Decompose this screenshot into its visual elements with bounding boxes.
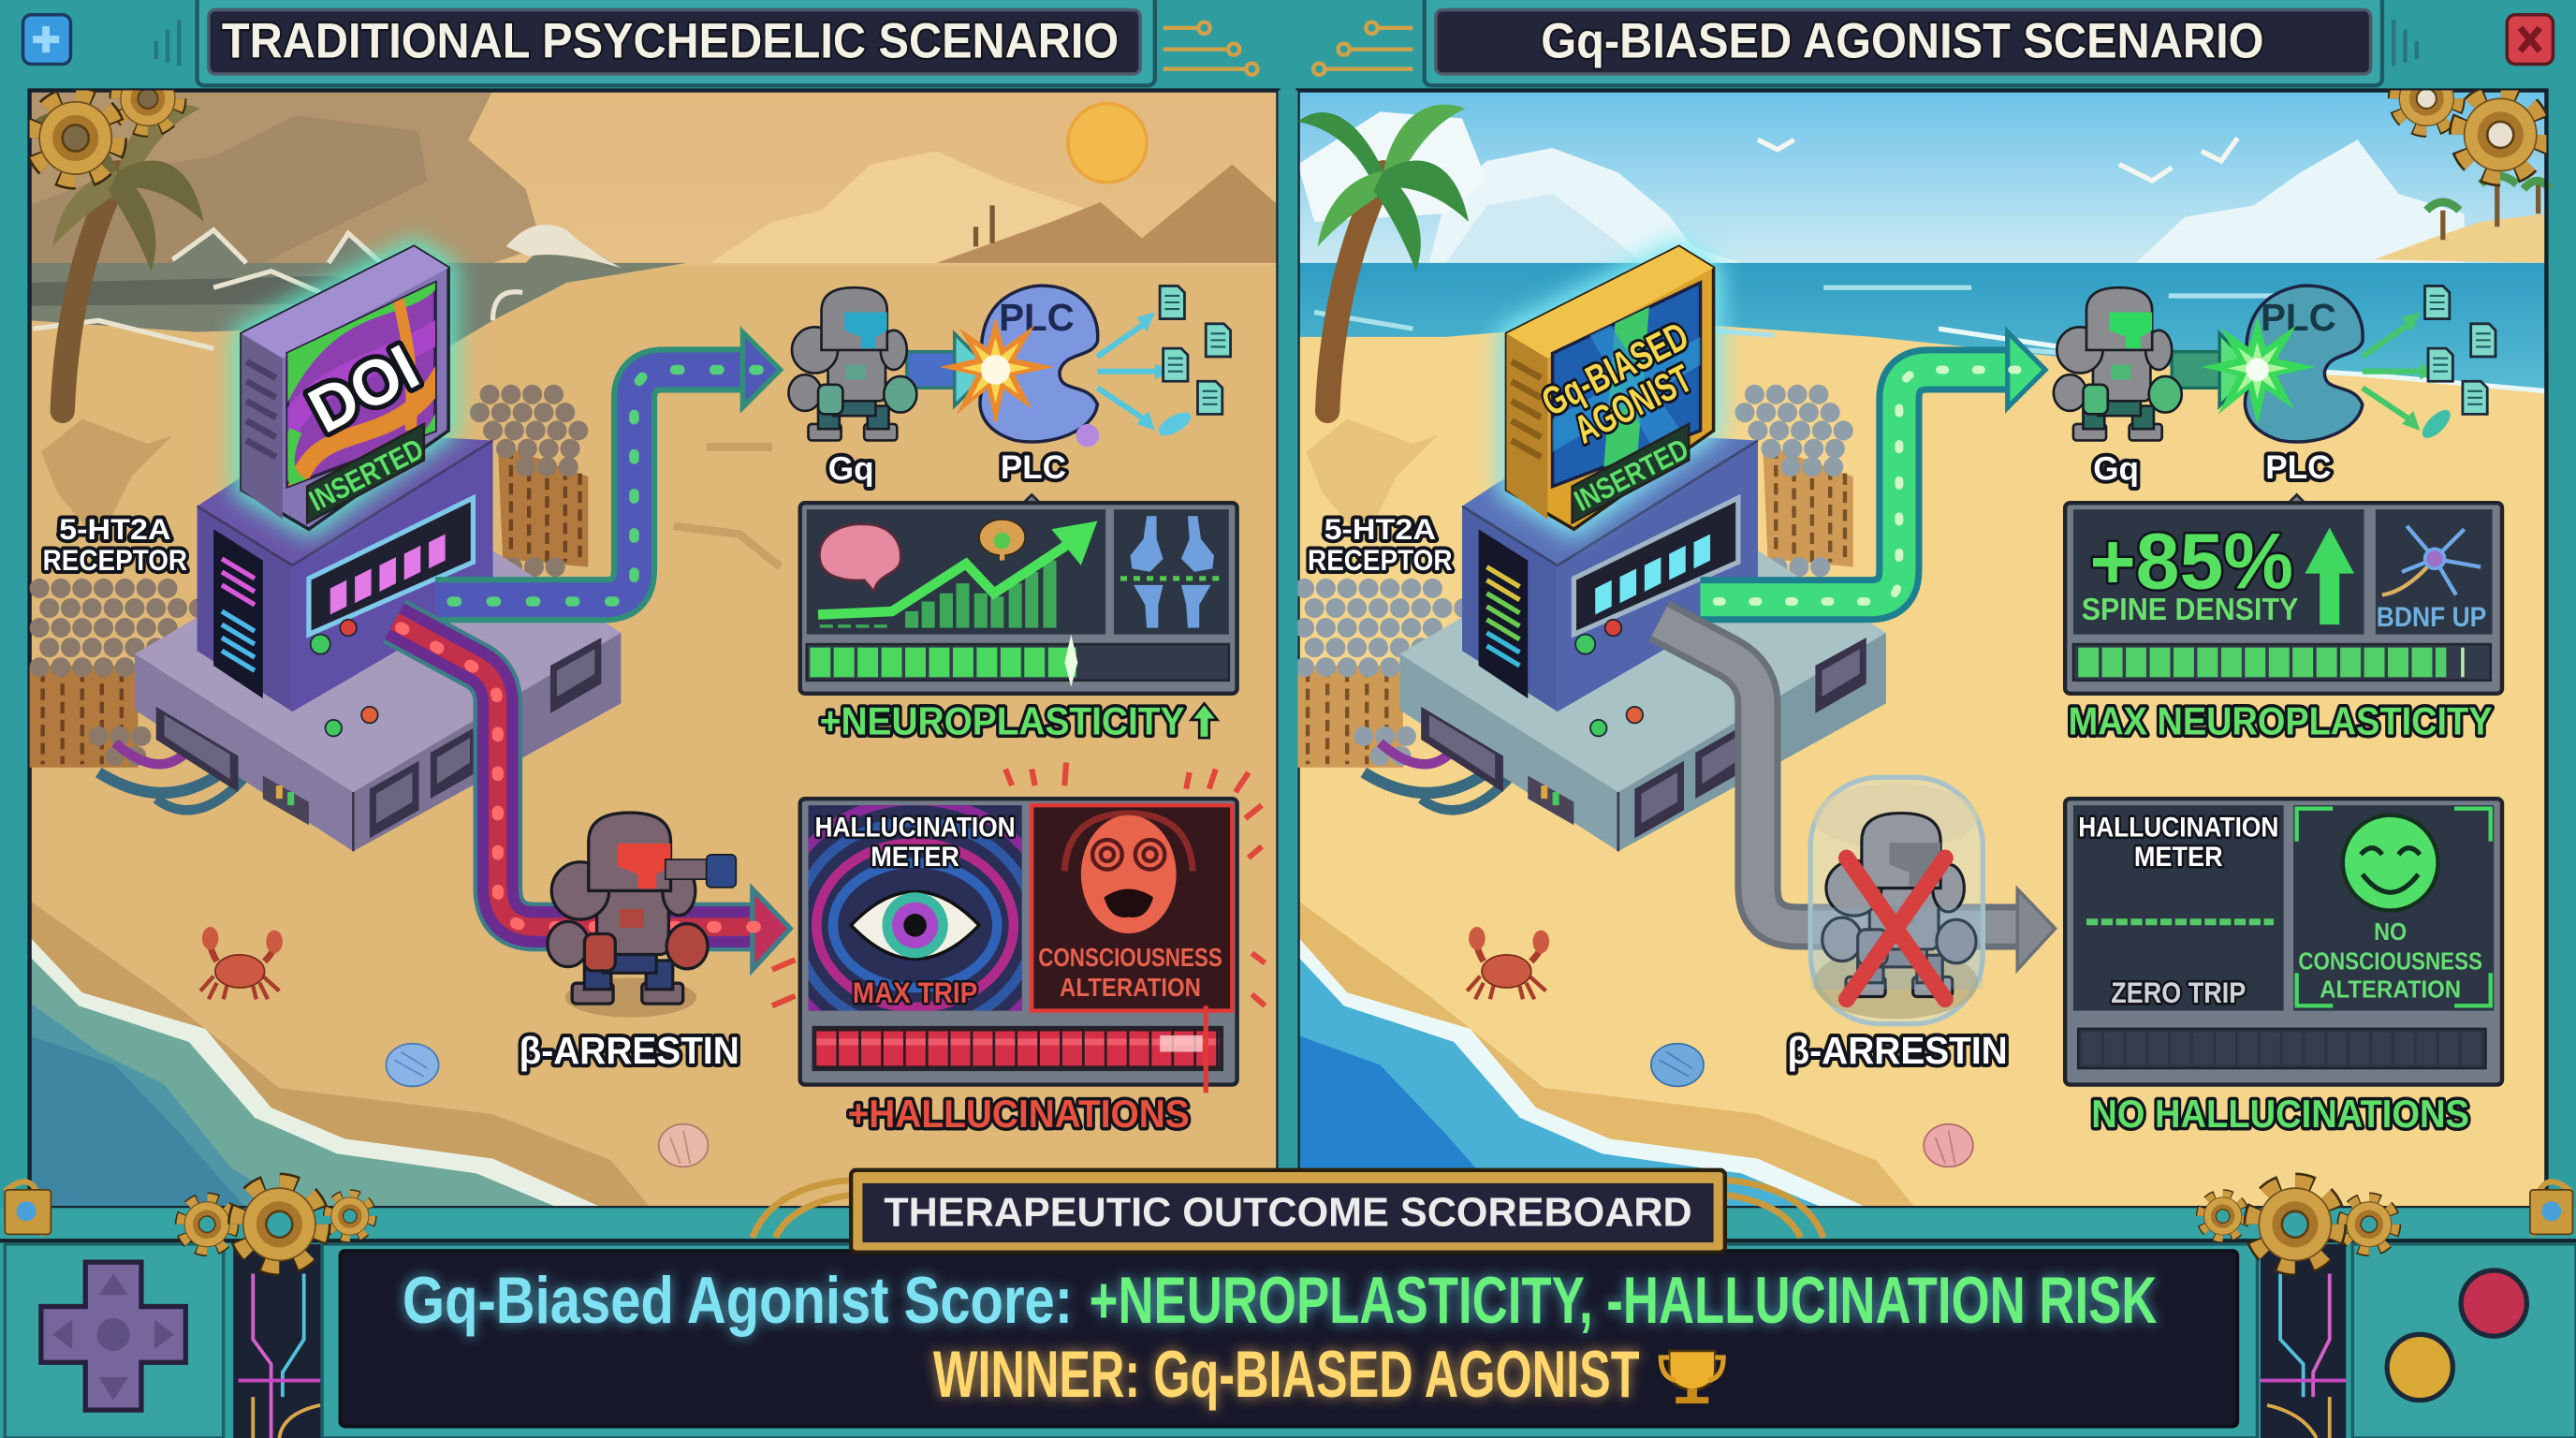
receptor label right: RECEPTOR bbox=[1308, 543, 1453, 577]
gold arcs left bbox=[753, 1180, 851, 1238]
icon: plus button bbox=[23, 15, 70, 64]
no consciousness text bbox=[2298, 917, 2482, 1004]
no consciousness text: ALTERATION bbox=[2320, 976, 2461, 1004]
heading bbox=[815, 813, 1016, 873]
center divider bbox=[1278, 91, 1298, 1208]
product arrows bbox=[1097, 322, 1158, 420]
panel dark outlines bbox=[30, 91, 1278, 1208]
consciousness text: ALTERATION bbox=[1060, 973, 1201, 1002]
meter bar bbox=[2073, 644, 2491, 681]
gears bottom left bbox=[183, 1185, 371, 1264]
score line: Gq-Biased Agonist Score: bbox=[402, 1263, 1073, 1337]
palm shadow right bbox=[1306, 419, 1438, 542]
icon: brain bbox=[819, 524, 900, 592]
crab left bbox=[200, 927, 283, 999]
panel: hallucination meter left bbox=[772, 763, 1265, 1093]
meter bar bbox=[813, 1027, 1222, 1070]
wet sand bbox=[1298, 901, 1915, 1208]
arrow: beta-arrestin pathway left bbox=[394, 622, 790, 970]
circuit board right bbox=[2261, 1244, 2346, 1438]
palm shadow left bbox=[41, 419, 172, 542]
label: beta-arrestin left: β-ARRESTIN bbox=[520, 1029, 739, 1072]
inserted label bbox=[307, 424, 424, 522]
corner brackets bbox=[2297, 809, 2491, 1005]
icon: left corner gears bbox=[37, 69, 178, 178]
caption: hallucinations left: +HALLUCINATIONS bbox=[848, 1092, 1190, 1136]
small arrow Gq to PLC left bbox=[907, 333, 990, 406]
receptor label left: RECEPTOR bbox=[43, 543, 187, 577]
psychedelic rings bbox=[809, 805, 1022, 1011]
panel: Gq-biased agonist beach scene bbox=[1298, 91, 2550, 1208]
icon: right corner gears bbox=[2397, 69, 2539, 174]
consciousness text: CONSCIOUSNESS bbox=[1038, 943, 1222, 972]
consciousness panel bbox=[1032, 805, 1232, 1011]
dark clouds bbox=[30, 91, 542, 263]
foam bbox=[1298, 937, 1868, 1208]
icon: eye bbox=[851, 891, 979, 959]
swirl screen bbox=[287, 283, 435, 487]
PLC label right: PLC bbox=[2265, 449, 2331, 486]
machine left bbox=[135, 431, 621, 851]
score line bbox=[402, 1263, 2158, 1337]
arrow: Gq pathway right bbox=[1701, 332, 2045, 601]
panel: button console bbox=[2352, 1244, 2576, 1438]
Gq label left: Gq bbox=[828, 451, 874, 488]
icon: trophy bbox=[1661, 1351, 1723, 1403]
arrow: blocked beta-arrestin pathway right bbox=[1660, 622, 2056, 970]
icon: left palm tree bbox=[33, 105, 204, 411]
small arrow Gq to PLC right bbox=[2172, 333, 2256, 406]
zero trip: ZERO TRIP bbox=[2111, 976, 2246, 1009]
icon: sun bbox=[1068, 104, 1147, 183]
robot: Gq right bbox=[2054, 287, 2182, 440]
receptor label left: 5-HT2A bbox=[59, 512, 171, 546]
icon: neuron bbox=[2382, 526, 2481, 594]
caption: max neuroplasticity: MAX NEUROPLASTICITY bbox=[2069, 699, 2492, 743]
circuit gold right bbox=[1313, 22, 1412, 75]
+85% value: +85% bbox=[2089, 517, 2293, 605]
consciousness text bbox=[1038, 943, 1222, 1002]
icon: up arrow bbox=[2305, 527, 2354, 624]
island bbox=[2374, 213, 2546, 263]
title plaque right bbox=[1425, 0, 2382, 85]
panel: neuroplasticity meter left bbox=[800, 494, 1237, 694]
machine right bbox=[1399, 431, 1886, 851]
heading: METER bbox=[871, 842, 959, 873]
icon: right palm tree bbox=[1298, 105, 1469, 411]
left screen lines bbox=[222, 559, 255, 605]
agonist label: Gq-BIASED bbox=[1535, 314, 1695, 424]
sea bbox=[1298, 263, 2546, 391]
scoreboard banner: THERAPEUTIC OUTCOME SCOREBOARD bbox=[884, 1190, 1692, 1236]
winner line: WINNER: Gq-BIASED AGONIST bbox=[933, 1337, 1640, 1411]
gold arcs right bbox=[1725, 1180, 1823, 1238]
icon: close button bbox=[2507, 15, 2553, 64]
cartridge: DOI: INSERTED bbox=[303, 432, 429, 518]
icon: red button bbox=[2461, 1270, 2526, 1336]
panel: neuroplasticity meter right bbox=[2065, 494, 2502, 694]
icon: synapses bbox=[1131, 516, 1214, 628]
robot: beta-arrestin active bbox=[548, 813, 736, 1018]
DOI label: DOI bbox=[298, 330, 430, 447]
title plaque right: Gq-BIASED AGONIST SCENARIO bbox=[1541, 13, 2264, 68]
max trip: MAX TRIP bbox=[853, 976, 977, 1009]
no consciousness text: CONSCIOUSNESS bbox=[2298, 947, 2482, 976]
title plaque left: TRADITIONAL PSYCHEDELIC SCENARIO bbox=[222, 13, 1119, 68]
chart bars bbox=[912, 561, 1050, 628]
empty meter bbox=[2078, 1029, 2485, 1068]
Gq label right: Gq bbox=[2093, 451, 2139, 488]
spine density: SPINE DENSITY bbox=[2082, 593, 2298, 627]
icon: spiral face bbox=[1064, 814, 1193, 933]
light clouds bbox=[710, 151, 1183, 263]
cartridge: DOI bbox=[242, 246, 448, 529]
membrane right bbox=[1295, 394, 1853, 810]
caption: no hallucinations: NO HALLUCINATIONS bbox=[2091, 1092, 2469, 1136]
shell blue right bbox=[1651, 1044, 1704, 1086]
vents left bbox=[156, 20, 179, 66]
darker cloud band bbox=[30, 115, 427, 263]
birds bbox=[1758, 138, 2237, 181]
circuit gold left bbox=[1164, 22, 1258, 75]
no consciousness text: NO bbox=[2374, 917, 2407, 946]
alert ticks bbox=[772, 763, 1265, 1005]
receptor label right: 5-HT2A bbox=[1325, 512, 1436, 546]
panel: traditional psychedelic beach scene bbox=[30, 91, 1278, 1208]
distant island palms bbox=[976, 205, 992, 246]
bottom strip bbox=[0, 1208, 2576, 1244]
heading: HALLUCINATION bbox=[815, 813, 1016, 844]
panel: d-pad console bbox=[5, 1244, 224, 1438]
crab right bbox=[1467, 927, 1549, 999]
PLC enzyme left bbox=[940, 286, 1231, 447]
vents right bbox=[2393, 20, 2417, 66]
chart rising arrow bbox=[818, 539, 1076, 615]
scoreboard banner bbox=[851, 1170, 1725, 1253]
cartridge: Gq-biased agonist: INSERTED bbox=[1569, 432, 1693, 518]
mountains bbox=[936, 165, 1278, 263]
wet sand bbox=[30, 901, 651, 1208]
meter bar bbox=[807, 644, 1229, 681]
panel: hallucination meter right bbox=[2065, 799, 2502, 1085]
deep water bbox=[30, 1035, 246, 1208]
PLC label left: PLC bbox=[1001, 449, 1066, 486]
capsule with blocked robot bbox=[1810, 777, 1983, 1024]
shallow water bbox=[30, 937, 603, 1208]
sand marks bbox=[674, 447, 781, 567]
membrane left bbox=[30, 394, 588, 810]
gears bottom right bbox=[2203, 1185, 2393, 1264]
shell pink right bbox=[1924, 1124, 1973, 1167]
heading bbox=[2078, 813, 2278, 873]
PLC enzyme left: PLC bbox=[999, 296, 1075, 339]
PLC enzyme right: PLC bbox=[2261, 296, 2336, 339]
PLC enzyme right bbox=[2202, 286, 2496, 443]
heading: METER bbox=[2134, 842, 2223, 873]
receptor label right bbox=[1308, 512, 1453, 577]
waves bbox=[172, 230, 381, 292]
agonist label: AGONIST bbox=[1567, 356, 1699, 452]
icon: small brain bbox=[979, 520, 1025, 561]
arrow: Gq pathway left bbox=[435, 332, 781, 601]
shell pink left bbox=[659, 1124, 708, 1167]
icon: smiley bbox=[2343, 815, 2438, 911]
grey sea bbox=[30, 263, 687, 352]
icon: padlock right bbox=[2530, 1181, 2572, 1236]
white clouds bbox=[1429, 148, 1741, 263]
score line: +NEUROPLASTICITY, -HALLUCINATION RISK bbox=[1090, 1263, 2158, 1337]
caption: neuroplasticity left: +NEUROPLASTICITY bbox=[820, 699, 1184, 743]
cartridge: Gq-biased agonist bbox=[1506, 246, 1714, 529]
receptor label left bbox=[43, 512, 187, 577]
label: beta-arrestin right: β-ARRESTIN bbox=[1788, 1029, 2008, 1072]
robot: Gq left bbox=[788, 287, 916, 440]
shell blue left bbox=[386, 1044, 439, 1086]
BDNF up: BDNF UP bbox=[2377, 602, 2486, 633]
circuit board left bbox=[233, 1244, 322, 1438]
agonist label bbox=[1535, 314, 1713, 460]
icon: yellow button bbox=[2387, 1334, 2452, 1401]
heading: HALLUCINATION bbox=[2078, 813, 2278, 844]
wave peaks bbox=[172, 230, 621, 268]
icon: padlock left bbox=[5, 1181, 51, 1236]
panel: score screen bbox=[322, 1244, 2258, 1438]
spark bbox=[940, 316, 1054, 426]
title plaque left bbox=[198, 0, 1155, 85]
icon: red X bbox=[1847, 858, 1945, 999]
flat line bbox=[2086, 920, 2274, 924]
icon: d-pad bbox=[41, 1262, 185, 1410]
